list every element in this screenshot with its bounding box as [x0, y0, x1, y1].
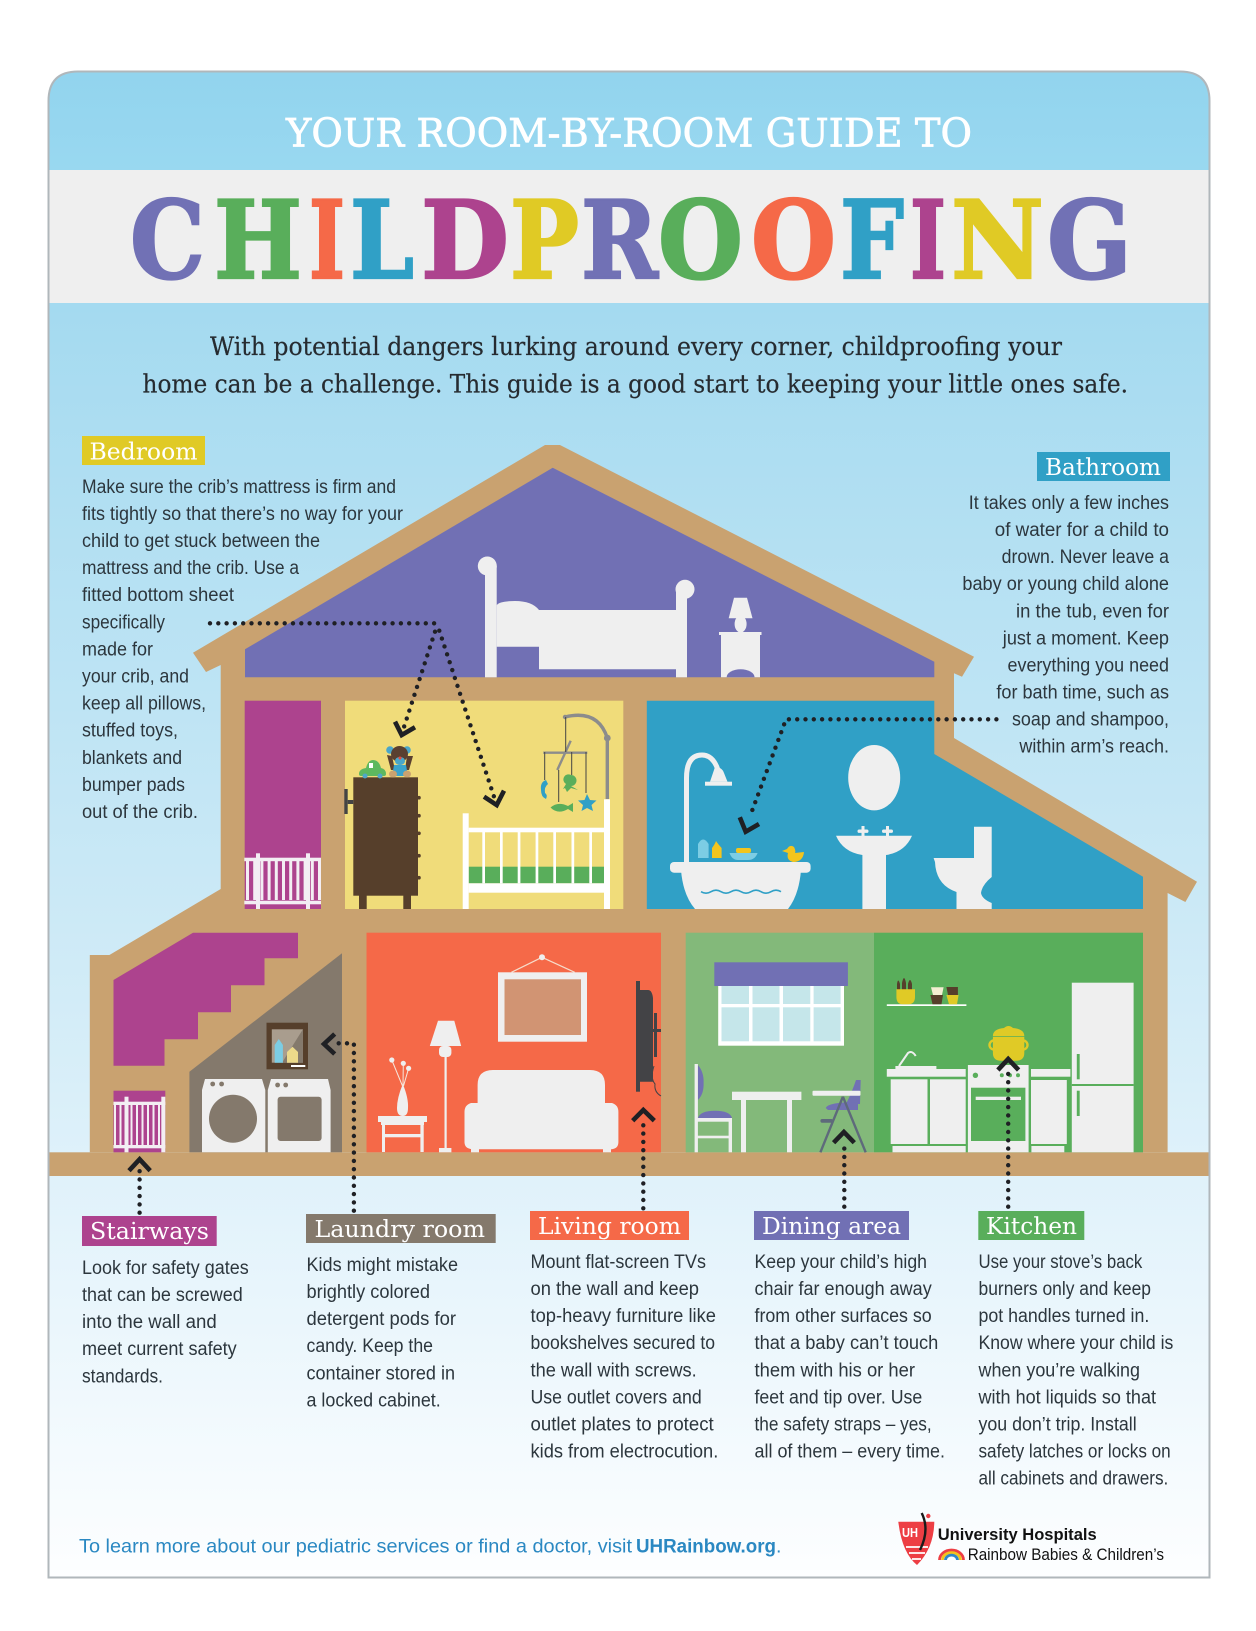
label: dining area: Dining area — [762, 1214, 901, 1240]
icon: bath toys and soap — [698, 840, 804, 862]
panel: stairways text — [82, 1216, 249, 1387]
text: dining tips: from other surfaces so — [754, 1306, 932, 1327]
text: bedroom tips: your crib, and — [82, 667, 189, 688]
title: childproofing — [130, 178, 1132, 304]
footer: call to action: . — [776, 1536, 781, 1558]
icon: dining chair — [695, 1064, 732, 1152]
arrow: bathroom callout — [740, 719, 996, 832]
icon: sink — [836, 826, 912, 909]
text: kitchen tips: with hot liquids so that — [978, 1387, 1157, 1408]
room: bathroom — [647, 701, 1143, 909]
text: University Hospitals: University Hospitals — [938, 1525, 1097, 1544]
text: living room tips: top-heavy furniture like — [530, 1306, 716, 1327]
text: laundry tips — [306, 1255, 458, 1411]
heading: your room-by-room guide to: YOUR ROOM-BY-ROOM GUIDE TO — [285, 112, 972, 156]
icon: stove — [968, 1065, 1029, 1152]
panel: bedroom text — [82, 436, 404, 823]
icon: dining table — [732, 1092, 801, 1152]
text: living room tips: on the wall and keep — [530, 1279, 699, 1300]
text: living room tips: outlet plates to protect — [530, 1414, 714, 1436]
icon: sofa — [464, 1070, 618, 1152]
text: dining tips: the safety straps – yes, — [754, 1414, 932, 1436]
text: kitchen tips: you don’t trip. Install — [978, 1414, 1137, 1436]
arrow: bedroom callouts — [210, 623, 504, 805]
room: attic bedroom — [245, 468, 934, 677]
intro text: home can be a challenge. This guide is a good start to keeping your little ones safe. — [142, 370, 1128, 400]
text: bedroom tips: made for — [82, 640, 154, 660]
label: kitchen: Kitchen — [986, 1214, 1077, 1240]
icon: toy car — [359, 760, 386, 778]
text: Rainbow Babies & Children's: Rainbow Babies & Children’s — [968, 1545, 1164, 1564]
label: bedroom: Bedroom — [90, 439, 198, 465]
icon: rainbow — [940, 1550, 964, 1560]
icon: bed — [478, 556, 694, 677]
text: stairways tips: meet current safety — [82, 1339, 237, 1360]
icon: shower — [686, 755, 732, 862]
panel: bathroom text — [962, 452, 1170, 758]
title: childproofing: D — [421, 178, 509, 304]
text: dining tips: feet and tip over. Use — [754, 1387, 922, 1408]
text: dining tips: all of them – every time. — [754, 1442, 945, 1463]
text: laundry tips: Kids might mistake — [306, 1255, 458, 1276]
text: bedroom tips: out of the crib. — [82, 802, 198, 823]
text: laundry tips: detergent pods for — [306, 1309, 457, 1330]
room: nursery — [344, 701, 623, 909]
icon: stair gate — [114, 1097, 165, 1152]
text: bathroom tips: drown. Never leave a — [1002, 547, 1169, 568]
text: living room tips: Mount flat-screen TVs — [530, 1252, 706, 1273]
title: childproofing: H — [214, 178, 302, 304]
text: dining tips: them with his or her — [754, 1360, 916, 1381]
text: kitchen tips: safety latches or locks on — [978, 1442, 1171, 1463]
icon: teddy bear — [386, 746, 413, 778]
text: bathroom tips: It takes only a few inches — [969, 493, 1169, 514]
icon: refrigerator — [1072, 983, 1134, 1152]
icon: crib mobile — [541, 715, 611, 812]
title: childproofing: G — [1047, 178, 1132, 304]
icon: dresser — [344, 777, 421, 909]
text: stairways tips: Look for safety gates — [82, 1258, 249, 1279]
icon: vase on side table — [378, 1057, 427, 1152]
house structure — [48, 445, 1209, 1176]
text: bathroom tips: in the tub, even for — [1016, 601, 1170, 622]
icon: high chair — [812, 1080, 866, 1152]
room: laundry — [189, 953, 342, 1152]
text: laundry tips: brightly colored — [306, 1282, 430, 1303]
icon: pot — [990, 1026, 1028, 1061]
arrow: kitchen callout — [998, 1059, 1019, 1207]
label: laundry room: Laundry room — [314, 1217, 485, 1243]
room: kitchen — [874, 933, 1143, 1152]
title: childproofing: F — [840, 178, 904, 304]
text: kitchen tips: pot handles turned in. — [978, 1306, 1149, 1327]
label: living room: Living room — [538, 1214, 681, 1240]
icon: wall-mounted tv — [636, 981, 661, 1096]
house — [48, 445, 1209, 1176]
arrow: stairways callout — [129, 1159, 150, 1213]
text: bathroom tips: everything you need — [1008, 656, 1169, 676]
text: bathroom tips: of water for a child to — [995, 520, 1169, 541]
text: stairways tips: that can be screwed — [82, 1285, 243, 1306]
title: childproofing: P — [510, 178, 579, 304]
text: kitchen tips: all cabinets and drawers. — [978, 1469, 1168, 1490]
text: bedroom tips: child to get stuck between the — [82, 531, 320, 552]
arrow: dining callout — [834, 1132, 854, 1207]
icon: UH shield — [898, 1513, 934, 1565]
icon: detergent shelf — [266, 1023, 308, 1069]
text: bathroom tips: for bath time, such as — [996, 683, 1169, 704]
label: stairways: Stairways — [90, 1219, 209, 1245]
icon: window — [714, 962, 848, 1046]
text: bedroom tips: Make sure the crib’s mattress is firm and — [82, 477, 396, 498]
panel: kitchen text — [978, 1211, 1173, 1490]
room: stairs — [114, 933, 298, 1152]
icon: crib — [463, 799, 610, 909]
title: childproofing: O — [658, 178, 743, 304]
text: bathroom tips: within arm’s reach. — [1018, 737, 1169, 758]
text: bathroom tips: baby or young child alone — [962, 574, 1169, 595]
text: stairways tips: into the wall and — [82, 1312, 217, 1333]
text: bedroom tips: fitted bottom sheet — [82, 585, 235, 606]
text: bedroom tips: fits tightly so that there’s no way for your — [82, 504, 404, 525]
text: bedroom tips — [82, 477, 404, 823]
text: bedroom tips: bumper pads — [82, 775, 185, 796]
icon: wall shelf with cups — [887, 978, 966, 1006]
text: dining tips — [754, 1252, 945, 1463]
icon: side counter — [1031, 1069, 1070, 1152]
text: dining tips: chair far enough away — [754, 1279, 932, 1300]
text: stairways tips: standards. — [82, 1366, 163, 1387]
title: childproofing: I — [910, 178, 946, 304]
text: kitchen tips: Use your stove’s back — [978, 1252, 1143, 1273]
arrow: living room callout — [633, 1110, 654, 1208]
text: living room tips: bookshelves secured to — [530, 1333, 715, 1354]
title: childproofing: L — [350, 178, 414, 304]
footer: call to action: UHRainbow.org — [636, 1536, 776, 1558]
text: bathroom tips: soap and shampoo, — [1012, 710, 1169, 731]
icon: washer and dryer — [202, 1079, 331, 1152]
icon: baby gate — [244, 853, 321, 909]
text: laundry tips: a locked cabinet. — [306, 1390, 441, 1411]
text: bathroom tips: just a moment. Keep — [1002, 628, 1169, 649]
text: bedroom tips: specifically — [82, 612, 165, 633]
text: dining tips: Keep your child’s high — [754, 1252, 927, 1273]
text: stairways tips — [82, 1258, 249, 1387]
panel: dining area text — [754, 1211, 945, 1463]
icon: bathtub — [670, 862, 811, 909]
intro text — [142, 332, 1128, 400]
text: bathroom tips — [962, 493, 1170, 758]
title: childproofing: R — [581, 178, 659, 304]
icon: nightstand and lamp — [719, 598, 762, 677]
text: bedroom tips: stuffed toys, — [82, 721, 178, 742]
text: living room tips: kids from electrocution. — [530, 1442, 718, 1463]
text: dining tips: that a baby can’t touch — [754, 1333, 938, 1354]
footer: call to action: To learn more about our pediatric services or find a doctor, visit — [79, 1536, 633, 1558]
text: kitchen tips: burners only and keep — [978, 1279, 1151, 1300]
room: dining area — [686, 933, 874, 1152]
title: childproofing: O — [751, 178, 836, 304]
room: upstairs stair landing — [244, 701, 321, 909]
label: bathroom: Bathroom — [1045, 455, 1161, 481]
intro text: With potential dangers lurking around every corner, childproofing your — [210, 332, 1063, 362]
icon: mirror — [848, 745, 900, 810]
title: childproofing: N — [951, 178, 1044, 304]
icon: sink counter and cabinets — [887, 1052, 966, 1152]
title: childproofing: I — [309, 178, 345, 304]
icon: UH shield: UH — [902, 1525, 918, 1540]
text: living room tips — [530, 1252, 718, 1463]
text: living room tips: Use outlet covers and — [530, 1387, 702, 1408]
arrow: laundry callout — [324, 1034, 354, 1211]
title: childproofing: C — [130, 178, 205, 304]
text: kitchen tips: Know where your child is — [978, 1333, 1173, 1354]
room: living room — [366, 933, 661, 1152]
text: laundry tips: container stored in — [306, 1363, 455, 1384]
text: living room tips: the wall with screws. — [530, 1360, 697, 1381]
icon: framed picture — [498, 954, 587, 1042]
panel: laundry text — [306, 1214, 496, 1411]
icon: toilet — [934, 827, 992, 909]
text: bedroom tips: mattress and the crib. Use a — [82, 558, 299, 579]
text: bedroom tips: keep all pillows, — [82, 694, 206, 715]
text: laundry tips: candy. Keep the — [306, 1336, 433, 1357]
text: kitchen tips: when you’re walking — [978, 1360, 1140, 1381]
text: kitchen tips — [978, 1252, 1173, 1490]
logo: University Hospitals Rainbow Babies & Children's — [898, 1513, 1164, 1565]
panel: living room text — [530, 1211, 718, 1463]
icon: floor lamp — [430, 1021, 461, 1152]
text: bedroom tips: blankets and — [82, 748, 182, 769]
